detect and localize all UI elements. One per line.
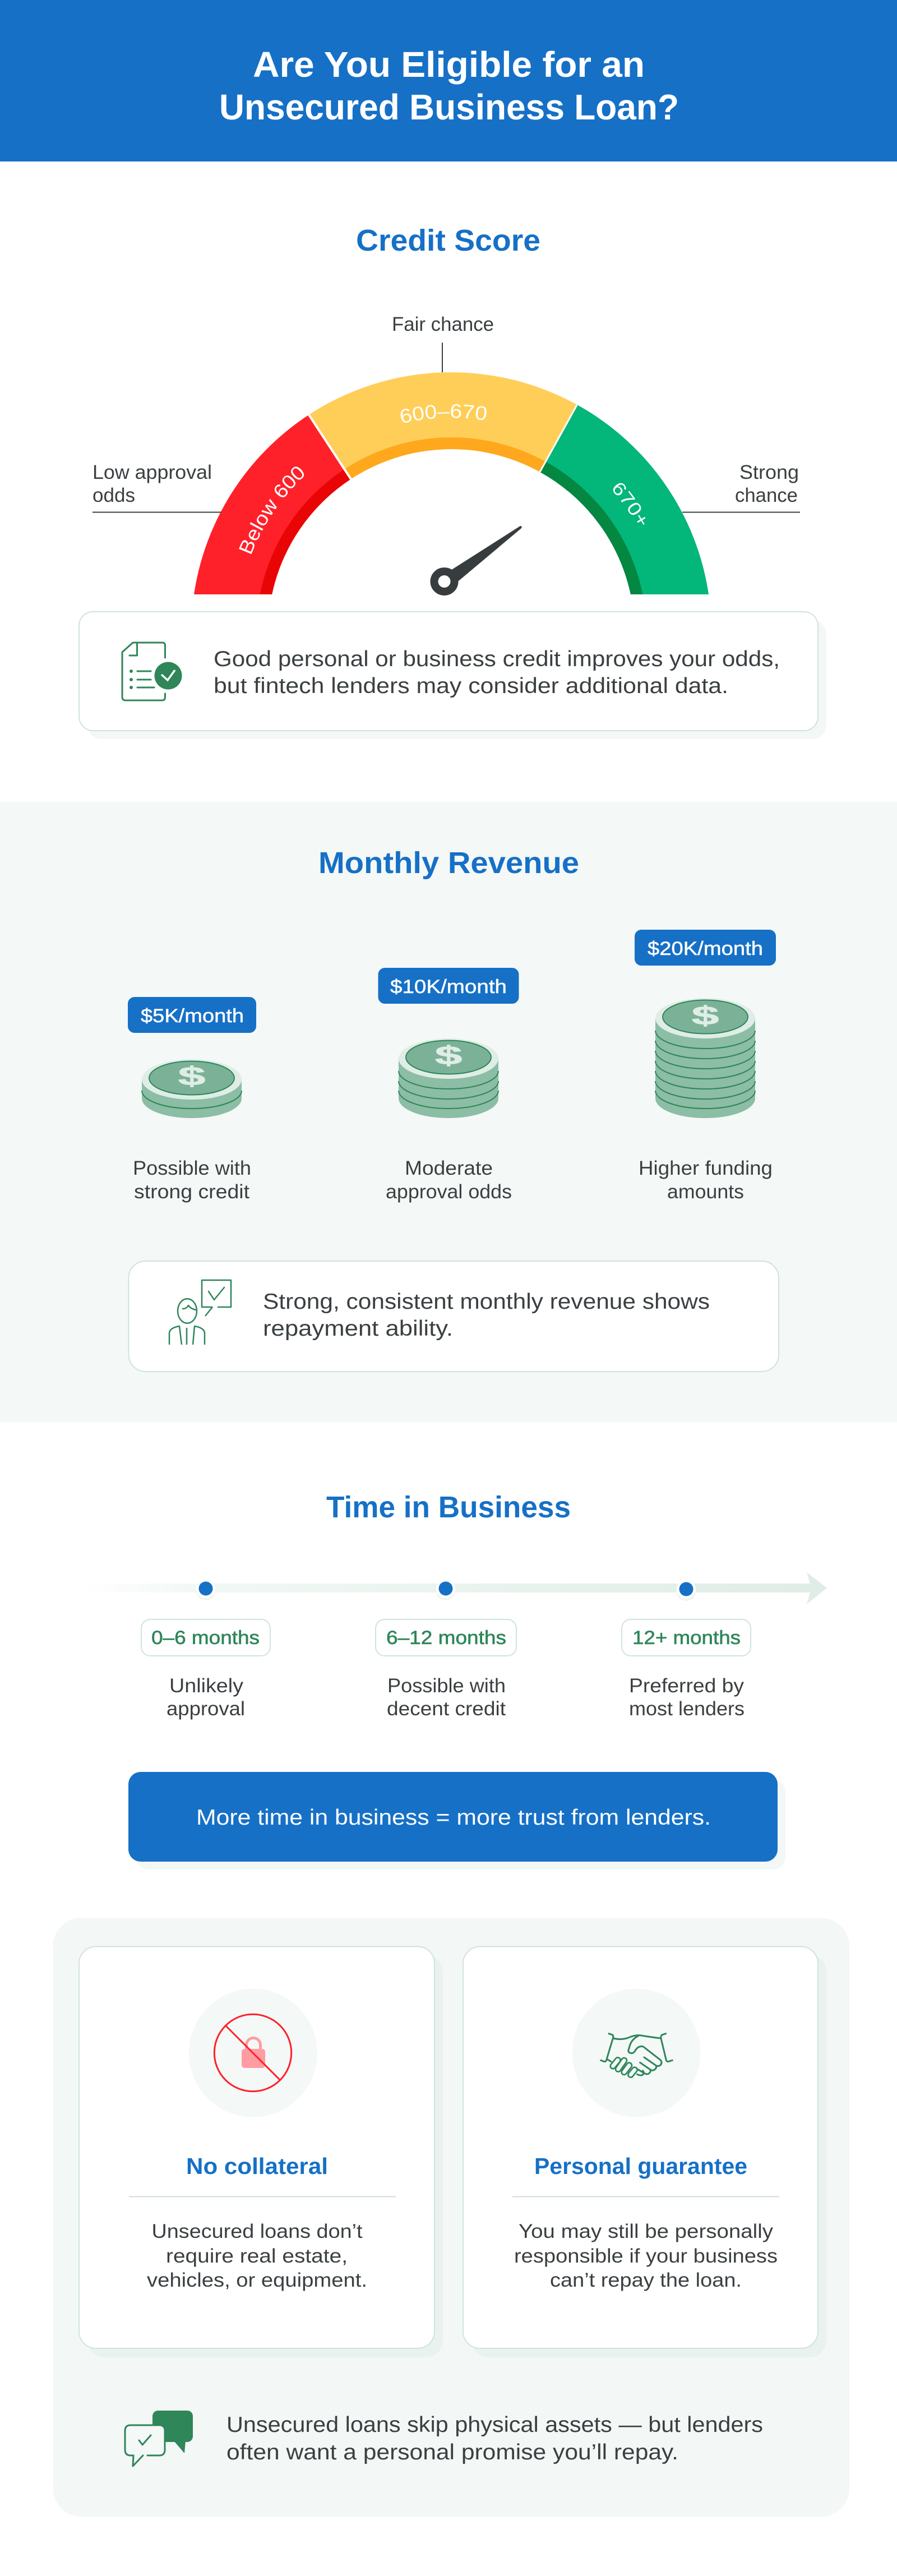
badge: 5K: $5K/month	[141, 1005, 244, 1027]
badge: 20K	[635, 930, 776, 966]
gauge segment: below 600	[194, 415, 351, 594]
no collateral text: vehicles, or equipment.	[147, 2269, 367, 2291]
icon: coin stack 5K	[142, 1059, 242, 1118]
gauge segment: below 600: Below 600	[239, 467, 304, 554]
timeline dot 2	[436, 1579, 456, 1600]
title	[219, 44, 679, 127]
personal guarantee text: responsible if your business	[514, 2245, 778, 2267]
badge: 20K: $20K/month	[648, 938, 763, 959]
gauge segment: 600-670	[309, 372, 577, 479]
icon: person with speech bubble	[169, 1280, 231, 1345]
callout: time in business	[128, 1772, 785, 1869]
gauge label: strong chance: Strong	[739, 461, 799, 483]
badge: 10K	[378, 968, 519, 1004]
icon: crossed-out lock	[189, 1988, 317, 2117]
summary note text	[226, 2413, 763, 2464]
timeline stage: 0-6 months: approval	[167, 1698, 245, 1720]
timeline dot 1	[196, 1579, 216, 1600]
timeline stage: 6-12 months: 6–12 months	[386, 1627, 506, 1649]
timeline dot 3	[676, 1580, 696, 1601]
callout: time in business: More time in business = more trust from lenders.	[196, 1806, 711, 1830]
timeline stage: 6-12 months	[376, 1619, 516, 1720]
revenue column: 10K	[378, 968, 519, 1203]
icon: chat bubbles	[125, 2411, 193, 2466]
header banner	[0, 0, 897, 161]
personal guarantee text: You may still be personally	[519, 2220, 774, 2242]
label: 5K	[133, 1157, 251, 1203]
no collateral text: require real estate,	[166, 2245, 348, 2267]
card: no collateral	[79, 1947, 443, 2357]
heading: time in business: Time in Business	[326, 1490, 571, 1524]
title: Unsecured Business Loan?	[219, 87, 679, 127]
label: 5K: strong credit	[134, 1181, 249, 1203]
timeline stage: 0-6 months: 0–6 months	[151, 1627, 260, 1649]
gauge needle	[434, 526, 522, 592]
heading: monthly revenue: Monthly Revenue	[318, 846, 579, 880]
icon: handshake	[572, 1988, 701, 2117]
gauge label: fair chance: Fair chance	[392, 313, 494, 335]
label: 5K: Possible with	[133, 1157, 251, 1179]
gauge label: strong chance: chance	[735, 484, 798, 506]
icon: coin stack 5K: $	[178, 1062, 205, 1091]
panel: monthly revenue	[0, 802, 897, 1422]
personal guarantee text	[514, 2220, 778, 2291]
revenue note text	[263, 1290, 710, 1341]
panel: collateral and guarantee	[53, 1918, 849, 2517]
label: 20K	[639, 1157, 773, 1203]
heading: personal guarantee: Personal guarantee	[534, 2153, 747, 2179]
revenue note text: Strong, consistent monthly revenue shows	[263, 1290, 710, 1314]
timeline stage: 6-12 months: Possible with	[387, 1675, 506, 1697]
label: 10K: approval odds	[386, 1181, 512, 1203]
summary note text: Unsecured loans skip physical assets — but lenders	[226, 2413, 763, 2437]
label: 20K: Higher funding	[639, 1157, 773, 1179]
summary note text: often want a personal promise you’ll repay.	[226, 2440, 678, 2464]
label: 10K: Moderate	[405, 1157, 493, 1179]
callout: summary note	[125, 2411, 763, 2466]
gauge label: low approval odds: odds	[93, 484, 135, 506]
gauge label: low approval odds	[93, 461, 221, 513]
gauge segment: 670+: 670+	[613, 483, 646, 525]
callout: revenue note	[129, 1261, 779, 1372]
label: 10K	[386, 1157, 512, 1203]
gauge segment: 670+	[540, 405, 709, 594]
gauge chart	[194, 372, 709, 595]
personal guarantee text: can’t repay the loan.	[550, 2269, 742, 2291]
callout: credit note	[79, 612, 826, 739]
timeline stage: 12+ months: 12+ months	[632, 1627, 741, 1649]
timeline stage: 12+ months: most lenders	[629, 1698, 745, 1720]
heading: credit score: Credit Score	[356, 224, 540, 257]
timeline stage: 0-6 months: Unlikely	[169, 1675, 244, 1697]
no collateral text	[147, 2220, 367, 2291]
revenue note text: repayment ability.	[263, 1317, 453, 1341]
timeline stage: 12+ months: Preferred by	[629, 1675, 745, 1697]
badge: 5K	[128, 997, 256, 1033]
revenue column: 5K	[128, 997, 256, 1203]
icon: coin stack 10K	[399, 1038, 498, 1118]
gauge label: low approval odds: Low approval	[93, 461, 212, 483]
icon: coin stack 10K: $	[435, 1041, 462, 1070]
icon: document with check	[122, 643, 182, 700]
gauge segment: 600-670: 600–670	[400, 404, 487, 423]
icon: coin stack 20K: $	[692, 1001, 719, 1030]
badge: 10K: $10K/month	[390, 976, 507, 998]
heading: no collateral: No collateral	[186, 2153, 328, 2179]
timeline stage: 6-12 months: decent credit	[387, 1698, 506, 1720]
no collateral text: Unsecured loans don’t	[151, 2220, 363, 2242]
credit note text: Good personal or business credit improves your odds,	[214, 647, 780, 671]
timeline stage: 12+ months	[622, 1619, 751, 1720]
timeline stage: 0-6 months	[141, 1619, 270, 1720]
revenue column: 20K	[635, 930, 776, 1203]
title: Are You Eligible for an	[253, 44, 645, 85]
timeline arrow	[84, 1572, 827, 1604]
icon: coin stack 20K	[655, 998, 755, 1118]
credit note text: but fintech lenders may consider additional data.	[214, 674, 728, 698]
card: personal guarantee	[463, 1947, 826, 2357]
credit note text	[214, 647, 780, 698]
label: 20K: amounts	[667, 1181, 744, 1203]
gauge label: strong chance	[682, 461, 800, 513]
